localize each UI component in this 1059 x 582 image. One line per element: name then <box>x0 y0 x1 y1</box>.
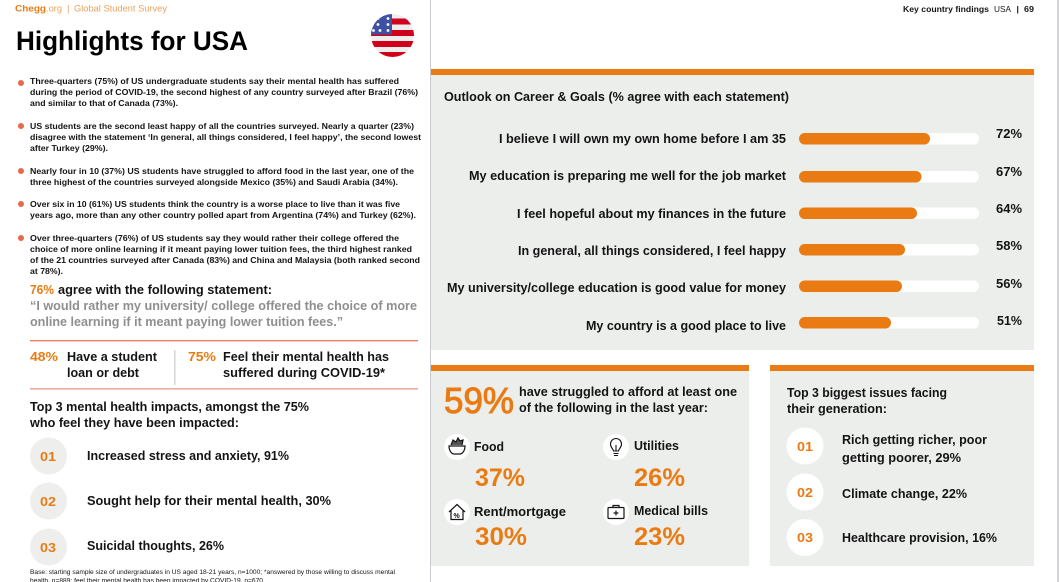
item: medical bills <box>603 499 708 551</box>
bar chart: 67% <box>996 164 1022 179</box>
key findings bullet list: three highest of the countries surveyed alongside Mexico (35%) and Saudi Arabia (34%). <box>30 177 398 187</box>
header: key country findings: 69 <box>1024 4 1034 14</box>
stat: 48% student loan or debt: loan or debt <box>67 365 140 380</box>
item: utilities: 26% <box>634 464 685 492</box>
header: Chegg.org Global Student Survey: Global Student Survey <box>74 4 167 14</box>
key findings bullet list: Nearly four in 10 (37%) US students have struggled to afford food in the last year, one of the <box>30 166 414 176</box>
bar chart <box>447 126 1022 333</box>
header: Chegg.org Global Student Survey <box>15 4 167 14</box>
statement: 76% agree <box>30 282 417 329</box>
list: mental health impacts: 03 <box>40 540 56 555</box>
bar chart: My education is preparing me well for the job market <box>469 168 787 183</box>
item: rent or mortgage: % <box>454 513 460 520</box>
item: food: 37% <box>475 464 525 492</box>
item: utilities: Utilities <box>634 438 679 453</box>
heading: top 3 mental health impacts <box>29 399 309 430</box>
issues heading: their generation: <box>787 401 887 416</box>
key findings bullet list: at 78%). <box>30 266 63 276</box>
title: Highlights for USA <box>16 26 248 56</box>
stat: 48% student loan or debt: Have a student <box>67 349 158 364</box>
statement: 76% agree: 76% <box>30 282 54 297</box>
key findings bullet list: Over six in 10 (61%) US students think the country is a worse place to live than it was five <box>30 199 400 209</box>
item: rent or mortgage: Rent/mortgage <box>474 504 566 519</box>
key findings bullet list: of the 21 countries surveyed after Canada (83%) and China and Malaysia (both ranked second <box>30 255 420 265</box>
header: key country findings: USA <box>994 4 1011 14</box>
issue 02: 02 <box>797 485 813 500</box>
footnote: Base: starting sample size of undergraduates in US aged 18-21 years, n=1000; *answered by those willing to discuss mental <box>30 569 396 576</box>
affordability heading: of the following in the last year: <box>519 400 708 415</box>
big stat: 59%: 59% <box>444 380 514 421</box>
issue 01: Rich getting richer, poor <box>842 432 987 447</box>
bar chart: My country is a good place to live <box>586 318 786 333</box>
issues heading: Top 3 biggest issues facing <box>787 385 947 400</box>
stat: 75% mental health suffered: Feel their mental health has <box>223 349 389 364</box>
panel: outlook on career and goals <box>431 69 1034 350</box>
affordability heading <box>519 384 737 415</box>
header: Chegg.org Global Student Survey: | <box>67 4 69 14</box>
heading: top 3 mental health impacts: who feel they have been impacted: <box>29 415 239 430</box>
item: rent or mortgage <box>444 499 566 551</box>
bar chart: 56% <box>996 276 1022 291</box>
issue 03: Healthcare provision, 16% <box>842 530 997 545</box>
statement: 76% agree: “I would rather my university/ college offered the choice of more <box>30 298 417 313</box>
statement: 76% agree: agree with the following statement: <box>58 282 272 297</box>
panel: biggest issues <box>770 365 1034 566</box>
icon: US flag <box>370 13 415 58</box>
issue 01 <box>786 428 987 465</box>
issue 03: 03 <box>797 530 813 545</box>
list: mental health impacts <box>30 438 331 566</box>
bar chart: My university/college education is good value for money <box>447 280 787 295</box>
header: Chegg.org Global Student Survey: Chegg <box>15 4 46 14</box>
header: key country findings <box>903 4 1034 14</box>
item: food <box>444 434 525 492</box>
header: key country findings: Key country findings <box>903 4 989 14</box>
list: mental health impacts: 02 <box>40 494 56 509</box>
issue 01: getting poorer, 29% <box>842 450 961 465</box>
key findings bullet list: Three-quarters (75%) of US undergraduate students say their mental health has suffered <box>30 76 399 86</box>
header: Chegg.org Global Student Survey: .org <box>46 4 62 14</box>
key findings bullet list: and similar to that of Canada (73%). <box>30 98 178 108</box>
item: food: Food <box>474 439 504 454</box>
list: mental health impacts: Increased stress and anxiety, 91% <box>87 448 289 463</box>
bar chart: In general, all things considered, I feel happy <box>518 243 787 258</box>
footnote <box>30 569 396 582</box>
stat: 48% student loan or debt: 48% <box>30 349 58 364</box>
list: mental health impacts: Sought help for their mental health, 30% <box>87 493 331 508</box>
header: key country findings: | <box>1016 4 1019 14</box>
stat: 48% student loan or debt <box>30 349 158 380</box>
list: mental health impacts: 01 <box>40 449 56 464</box>
panel: affordability <box>431 365 749 566</box>
issue 02: Climate change, 22% <box>842 486 967 501</box>
key findings bullet list: after Turkey (29%). <box>30 143 108 153</box>
list: mental health impacts: Suicidal thoughts, 26% <box>87 538 224 553</box>
issue 02 <box>786 474 967 510</box>
item: rent or mortgage: 30% <box>475 523 527 551</box>
issue 01: 01 <box>797 439 813 454</box>
item: medical bills: 23% <box>634 523 685 551</box>
key findings bullet list: choice of more online learning if it meant paying lower tuition fees, the third highest ranked <box>30 244 412 254</box>
key findings bullet list <box>18 76 421 276</box>
key findings bullet list: years ago, more than any other country polled apart from Argentina (74%) and Turkey (62%). <box>30 210 416 220</box>
heading: top 3 mental health impacts: Top 3 mental health impacts, amongst the 75% <box>30 399 309 414</box>
bar chart: 64% <box>996 201 1022 216</box>
bar chart: 58% <box>996 238 1022 253</box>
bar chart: 72% <box>996 126 1022 141</box>
stat: 75% mental health suffered <box>188 349 389 380</box>
bar chart: I believe I will own my own home before I am 35 <box>499 131 786 146</box>
key findings bullet list: US students are the second least happy of all the countries surveyed. Nearly a quarter (23%) <box>30 121 414 131</box>
panel heading: Outlook on Career & Goals (% agree with each statement) <box>444 89 789 104</box>
bar chart: 51% <box>997 313 1022 328</box>
bar chart: I feel hopeful about my finances in the future <box>517 206 786 221</box>
stat: 75% mental health suffered: 75% <box>188 349 216 364</box>
stat: 75% mental health suffered: suffered during COVID-19* <box>223 365 386 380</box>
item: utilities <box>603 434 685 492</box>
statement: 76% agree: online learning if it meant paying lower tuition fees.” <box>30 314 343 329</box>
item: medical bills: Medical bills <box>634 503 708 518</box>
key findings bullet list: disagree with the statement ‘In general, all things considered, I feel happy’, the second lowest <box>30 132 421 142</box>
affordability heading: have struggled to afford at least one <box>519 384 737 399</box>
key findings bullet list: Over three-quarters (76%) of US students say they would rather their college offered the <box>30 233 399 243</box>
key findings bullet list: during the period of COVID-19, the second highest of any country surveyed after Brazil (76%) <box>30 87 418 97</box>
issues heading <box>787 385 947 416</box>
issue 03 <box>786 519 997 556</box>
